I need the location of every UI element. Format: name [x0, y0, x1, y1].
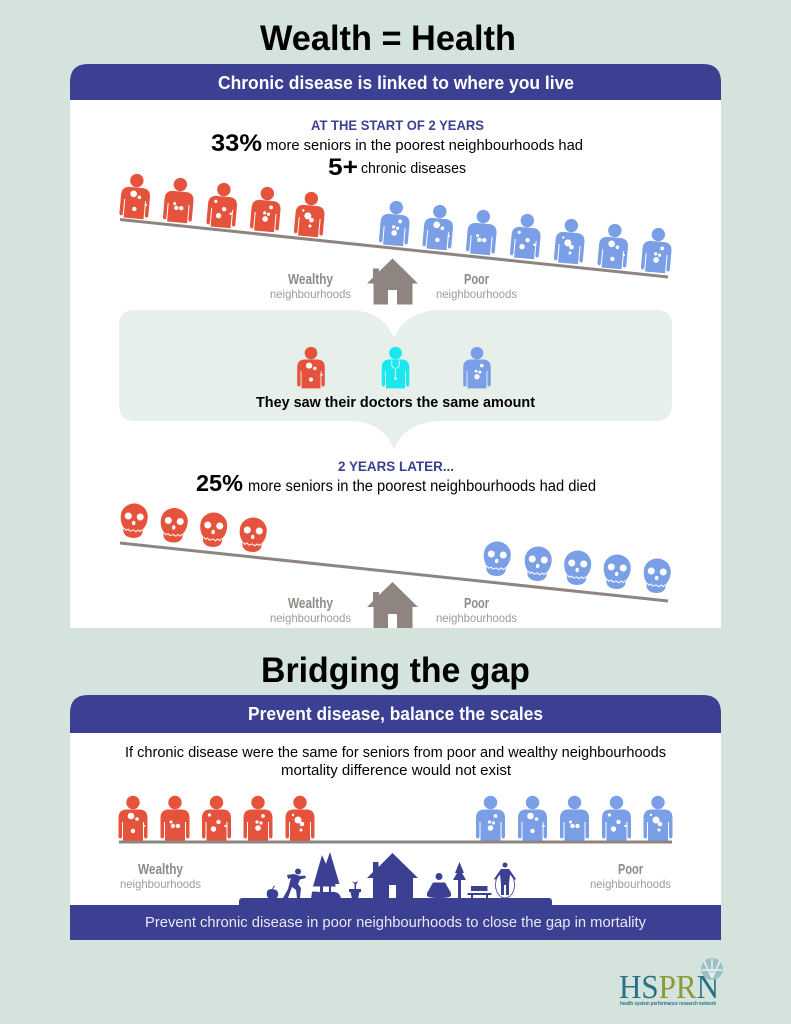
text: 33% statistic: more seniors in the poorest neighbourhoods had — [266, 137, 583, 154]
icon: house — [367, 258, 418, 304]
panel header: Chronic disease is linked to where you live — [218, 72, 574, 93]
panel: bridging the gap — [70, 695, 721, 940]
icon: potted plant — [349, 881, 361, 899]
red senior — [297, 347, 325, 388]
label: poor neighbourhoods: Poor — [618, 861, 643, 878]
footer banner with community silhouette — [70, 852, 721, 940]
logo: HSPRN: HSPRN — [619, 969, 719, 1006]
icon: runner — [283, 868, 306, 898]
icon: house door — [388, 290, 397, 305]
text: 25% statistic: more seniors in the poorest neighbourhoods had died — [248, 478, 596, 495]
balanced beam — [119, 840, 672, 844]
label: poor neighbourhoods — [436, 271, 517, 301]
text: explanation: If chronic disease were the same for seniors from poor and wealthy neighbourhoods — [125, 744, 666, 761]
panel header — [70, 64, 721, 100]
text: explanation: mortality difference would not exist — [281, 762, 512, 779]
heading: at the start of 2 years: AT THE START OF 2 YEARS — [311, 117, 484, 133]
label: poor neighbourhoods — [436, 595, 517, 625]
label: wealthy neighbourhoods: neighbourhoods — [120, 877, 201, 891]
label: poor neighbourhoods: neighbourhoods — [436, 611, 517, 625]
text: 33% statistic: chronic diseases — [361, 160, 466, 177]
text: 25% statistic: 25% — [196, 470, 243, 496]
label: wealthy neighbourhoods: Wealthy — [138, 861, 184, 878]
callout: same doctor visits — [119, 310, 672, 449]
label: wealthy neighbourhoods: Wealthy — [288, 595, 334, 612]
icon: globe tree — [701, 958, 723, 980]
icon: jump rope person — [494, 862, 516, 898]
label: wealthy neighbourhoods: neighbourhoods — [270, 287, 351, 301]
label: poor neighbourhoods: Poor — [464, 271, 489, 288]
icon: house — [367, 853, 418, 898]
text: 33% statistic — [211, 130, 583, 181]
panel header — [70, 695, 721, 733]
text: explanation — [125, 744, 666, 779]
icon: bench — [468, 886, 492, 899]
scale beam — [120, 543, 668, 601]
label: wealthy neighbourhoods — [270, 595, 351, 625]
icon: house door — [388, 614, 397, 628]
label: poor neighbourhoods — [590, 861, 671, 891]
title: bridging the gap: Bridging the gap — [261, 651, 530, 690]
label: wealthy neighbourhoods — [120, 861, 201, 891]
panel header: Prevent disease, balance the scales — [248, 704, 543, 724]
label: wealthy neighbourhoods: neighbourhoods — [270, 611, 351, 625]
icon: pine tree — [453, 862, 466, 898]
red seniors: wealthy — [118, 796, 314, 840]
label: wealthy neighbourhoods: Wealthy — [288, 271, 334, 288]
blue senior — [463, 347, 491, 388]
red skulls — [119, 502, 268, 553]
text: 33% statistic: 5+ — [328, 154, 358, 181]
text: footer message: Prevent chronic disease in poor neighbourhoods to close the gap in mortality — [145, 914, 646, 931]
red seniors: wealthy — [119, 173, 326, 238]
icon: meditating person — [427, 873, 451, 898]
label: poor neighbourhoods: neighbourhoods — [590, 877, 671, 891]
title: Wealth = Health: Wealth = Health — [260, 19, 516, 58]
icon: apple — [267, 886, 278, 899]
label: poor neighbourhoods: neighbourhoods — [436, 287, 517, 301]
heading: 2 years later: 2 YEARS LATER... — [338, 459, 454, 474]
doctor — [382, 347, 409, 388]
label: poor neighbourhoods: Poor — [464, 595, 489, 612]
blue skulls — [482, 540, 672, 594]
label: wealthy neighbourhoods — [270, 271, 351, 301]
text: same amount: They saw their doctors the same amount — [256, 394, 535, 411]
icon: house — [367, 582, 418, 628]
text: 25% statistic — [196, 470, 596, 496]
blue seniors: poor — [379, 200, 673, 274]
text: 33% statistic: 33% — [211, 130, 262, 157]
logo: HSPRN: health system performance research network — [620, 1001, 717, 1007]
panel: chronic disease — [70, 64, 721, 628]
blue seniors: poor — [476, 796, 672, 840]
scale beam — [120, 220, 668, 277]
icon: trees — [311, 852, 341, 899]
